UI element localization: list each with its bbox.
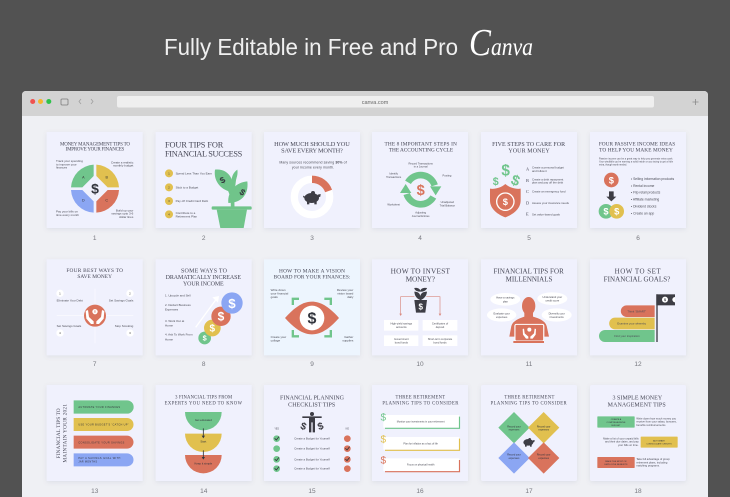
title: PLANNING TIPS TO CONSIDER — [491, 402, 568, 407]
tip bars: USE YOUR BUDGET'S 'CATCH UP' — [78, 424, 129, 427]
label: 13: 13 — [91, 488, 99, 495]
tip rows: Make a list of your unpaid bills — [603, 436, 639, 440]
tip labels: Create a realistic — [111, 160, 134, 164]
icon: rising coins with arrow: $ — [218, 310, 225, 324]
title — [391, 266, 451, 283]
text block: intro: Passive income can be a great way to help you generate extra cash. — [599, 157, 673, 160]
checklist: Create a Budget for Yourself — [294, 457, 330, 461]
title — [280, 396, 345, 408]
panel: card 9 vision board — [264, 259, 360, 355]
icon: coins and arrow: $ — [603, 207, 609, 217]
title: FOUR BEST WAYS TO — [66, 268, 123, 274]
title — [165, 395, 243, 406]
tip boxes: Focus on physical health — [407, 463, 435, 466]
ways list: Set Savings Goals — [109, 298, 134, 302]
bullet list: • Dividend stocks — [631, 205, 657, 209]
tips: goals — [271, 295, 278, 299]
icon: flag on pole: $ — [664, 298, 666, 302]
lettered steps: Assess your insurance needs — [532, 201, 570, 205]
title: TO HELP YOU MAKE MONEY — [599, 147, 673, 153]
title: HOW MUCH SHOULD YOU — [274, 141, 350, 148]
rotated title: MAINTAIN YOUR 2021 — [63, 404, 69, 463]
numbered list: 2 — [168, 185, 170, 189]
cycle step labels: Worksheet — [387, 202, 400, 206]
tip rows: COMPREHENSIVE — [607, 422, 626, 424]
diamond grid: expenses — [538, 429, 550, 432]
lettered steps: Create a debt repayment — [532, 177, 563, 181]
tip bars — [74, 400, 134, 466]
label: 8: 8 — [202, 361, 206, 368]
tips: Gather — [344, 335, 353, 339]
label: 9: 9 — [310, 361, 314, 368]
diamond grid: Record your — [507, 454, 521, 457]
icon: figure balancing dollars: $ — [316, 421, 326, 433]
tip rows: AUTOMATE — [653, 440, 665, 443]
panel: card 4 accounting cycle — [372, 132, 468, 228]
semicircle flow — [185, 412, 222, 473]
title: IMPROVE YOUR FINANCES — [66, 148, 125, 153]
tip bubbles: Understand your — [543, 295, 562, 299]
icon: person at laptop — [509, 297, 549, 343]
icon: figure balancing dollars — [299, 412, 326, 433]
title — [492, 142, 565, 155]
title: 3 SIMPLE MONEY — [612, 396, 663, 402]
tip bubbles — [487, 292, 572, 322]
title: HOW TO SET — [615, 268, 661, 276]
bullet list: • Affiliate marketing — [631, 197, 659, 201]
title — [382, 396, 459, 407]
bullet list: • Selling information products — [631, 177, 674, 181]
heading: Fully Editable in Free and Pro Canva — [164, 22, 533, 64]
panel: card 13 tips to maintain your 2021 — [47, 385, 143, 481]
icon: coins and arrow: $ — [614, 207, 620, 217]
ways list: 1 — [59, 291, 61, 295]
semicircle flow: Get educated — [195, 418, 212, 422]
list: Home — [165, 324, 173, 328]
tip rows: CONSOLIDATE CREDITS — [646, 443, 672, 446]
numbered list — [165, 169, 212, 218]
rotated title: FINANCIAL TIPS TO — [56, 408, 62, 458]
ways list: Set Savings Goals — [57, 324, 82, 328]
panel: card 6 passive income ideas — [590, 132, 686, 228]
label: 6: 6 — [636, 235, 640, 242]
title: SAVE EVERY MONTH? — [281, 147, 343, 154]
tip labels: savings upto 3-6 — [111, 212, 134, 216]
numbered list: Retirement Plan — [176, 214, 197, 218]
icon: coins and arrow — [599, 173, 624, 219]
panel: card 8 increase your income — [156, 259, 252, 355]
diamond grid: expenses — [509, 457, 520, 460]
title — [384, 141, 457, 153]
title: FOUR PASSIVE INCOME IDEAS — [599, 142, 675, 148]
ways list: 3 — [129, 331, 131, 335]
list: 3. Work Out at — [165, 319, 184, 323]
numbered list: Spend Less Than You Earn — [176, 171, 212, 175]
icon: rising coins with arrow: $ — [203, 334, 207, 343]
tip rows: MAKE THE MOST OF — [605, 460, 627, 463]
list — [165, 293, 193, 341]
label: 11: 11 — [526, 361, 533, 368]
heading: Fully Editable in Free and Pro Canva: Canva — [469, 22, 533, 64]
investment boxes: bond funds — [433, 340, 447, 344]
panel: card 14 tips from experts — [156, 385, 252, 481]
tip boxes: Monitor your investments in your retirement — [397, 421, 445, 424]
tip bubbles: plan — [503, 299, 508, 303]
icon: figure balancing dollars: $ — [299, 421, 308, 433]
icon: rising coins with arrow: $ — [210, 324, 216, 335]
lettered steps: D — [526, 200, 529, 205]
tip labels: to improve your — [56, 162, 77, 166]
tips — [271, 288, 354, 343]
title — [493, 267, 564, 284]
title: YOUR MONEY — [508, 149, 550, 155]
tip rows: retirement plans, including — [636, 460, 668, 464]
investment boxes: Government — [394, 337, 409, 341]
lettered steps: Create a personal budget — [532, 166, 564, 170]
icon: coins and arrow: $ — [609, 175, 615, 185]
title: FINANCIAL GOALS? — [604, 276, 670, 284]
label: 12: 12 — [634, 361, 642, 368]
cycle step labels: Unadjusted — [441, 200, 455, 204]
tips: Create your — [271, 335, 286, 339]
title — [604, 268, 670, 284]
list: 2. Deduct Business — [165, 303, 191, 307]
tips: your financial — [271, 291, 289, 295]
checklist — [273, 428, 351, 472]
title: YOUR INCOME — [183, 282, 224, 288]
list: 4. Ask To Work From — [165, 333, 193, 337]
cycle step labels: Identify — [389, 172, 399, 176]
tip labels: Build up your — [116, 208, 133, 212]
cycle step labels: Trial Balance — [440, 203, 456, 207]
numbered list: Contribute to a — [176, 211, 196, 215]
ways list: 2 — [129, 291, 131, 295]
icon: plant pot with arrows: $ — [418, 303, 423, 312]
ways list — [56, 290, 134, 337]
tip boxes: $ — [381, 434, 387, 445]
tip rows: benefits reimbursements — [636, 423, 666, 427]
icon: money plant: $ — [218, 174, 227, 186]
tip bars: CONSOLIDATE YOUR SAVINGS — [78, 441, 125, 444]
icon: shield with dollars: $ — [493, 176, 499, 188]
title: MONEY MANAGEMENT TIPS TO — [60, 142, 130, 147]
checklist: Create a Budget for Yourself — [294, 437, 330, 441]
investment boxes: deposit — [436, 325, 445, 329]
lettered steps: Set value-based goals — [532, 212, 561, 216]
title: MANAGEMENT TIPS — [608, 402, 666, 408]
text block: recommendation: your income every month. — [292, 165, 334, 169]
cycle step labels: Adjusting — [415, 211, 427, 215]
bullet list: • Create an app — [631, 212, 654, 216]
investment boxes: Short-term corporate — [428, 337, 453, 341]
lettered steps: Create an emergency fund — [532, 190, 566, 194]
investment boxes: Certificates of — [432, 322, 448, 326]
icon: shield with dollars: $ — [509, 172, 522, 190]
title: FINANCIAL SUCCESS — [165, 150, 243, 159]
tip rows: receive from your salary, bonuses, — [636, 420, 677, 424]
numbered list: Pay off Credit Card Debt — [176, 199, 208, 203]
investment boxes: bond funds — [395, 340, 409, 344]
tip rows: Write down how much money you — [636, 416, 677, 420]
label: 3: 3 — [310, 235, 314, 242]
title — [60, 142, 130, 153]
browser toolbar — [30, 96, 698, 108]
investment boxes — [384, 320, 457, 346]
tip labels: Track your spending — [56, 159, 83, 163]
diamond grid: Record your — [537, 454, 551, 457]
icon: rising coins with arrow: $ — [228, 296, 236, 311]
title: MONEY? — [406, 274, 435, 283]
checklist: NO — [346, 428, 349, 430]
tip bars: PAY A SAVINGS GOAL WITH — [78, 457, 121, 460]
label: 7: 7 — [93, 361, 97, 368]
tip bubbles: investments — [550, 315, 564, 319]
title: SOME WAYS TO — [181, 269, 228, 275]
panel: card 15 financial planning checklist — [264, 385, 360, 481]
tip labels: dollar lines — [119, 215, 134, 219]
tip bubbles: Have a savings — [496, 296, 515, 300]
title: THREE RETIREMENT — [395, 396, 445, 401]
chart: four-part ring: A — [82, 176, 85, 180]
title: FINANCIAL TIPS FOR — [493, 267, 564, 275]
icon: hands holding coin: $ — [94, 310, 96, 314]
tip rows: your bills on time. — [618, 443, 639, 447]
tip bubbles: Diversify your — [549, 311, 565, 315]
tip rows: CREATE A — [611, 418, 622, 421]
icon: shield with dollars: $ — [503, 197, 509, 207]
ways list: 4 — [59, 331, 61, 335]
text block: recommendation — [279, 160, 347, 169]
checklist: Create a Budget for Yourself — [294, 447, 330, 451]
tip labels: finances — [56, 166, 68, 170]
list: Expenses — [165, 307, 179, 311]
template gallery — [47, 132, 686, 495]
tip rows: EMPLOYEE BENEFITS — [604, 464, 628, 466]
title: FINANCIAL PLANNING — [280, 396, 345, 402]
label: 10: 10 — [416, 361, 424, 368]
title — [608, 396, 666, 408]
goal steps — [599, 305, 655, 342]
lettered steps: E — [526, 212, 529, 217]
title: THE 8 IMPORTANT STEPS IN — [384, 141, 457, 147]
title: DRAMATICALLY INCREASE — [166, 275, 241, 281]
browser window — [22, 91, 708, 497]
list: 1. Upcycle and Sell — [165, 293, 191, 297]
title: THE ACCOUNTING CYCLE — [389, 147, 453, 153]
title: CHECKLIST TIPS — [288, 402, 335, 408]
title — [274, 268, 351, 280]
title: PLANNING TIPS TO CONSIDER — [382, 402, 459, 407]
label: 4: 4 — [418, 235, 422, 242]
text block: intro: extra, though work needed. — [599, 163, 627, 166]
tip bars: JAR MONTHS — [78, 460, 97, 463]
goal steps: Examine your whereby — [617, 322, 647, 326]
tip rows: and their due dates, and pay — [605, 440, 639, 444]
title: FIVE STEPS TO CARE FOR — [492, 142, 565, 148]
investment boxes: accounts — [396, 325, 407, 329]
goal steps: Find your inspiration — [614, 334, 640, 338]
heading: Fully Editable in Free and Pro Canva: Fully Editable in Free and Pro — [164, 34, 458, 60]
panel: card 3 how much should you save — [264, 132, 360, 228]
numbered list: 3 — [168, 199, 170, 203]
browser toolbar: canva.com — [362, 100, 389, 106]
label: 5: 5 — [527, 235, 531, 242]
text block: intro: Your windfalls you're earning a solid inside or you trying to get a little — [599, 160, 674, 163]
cycle step labels: Transactions — [386, 175, 402, 179]
lettered steps: and follow it — [532, 169, 547, 173]
cycle step labels: Journal Entries — [412, 214, 430, 218]
tips: Write down — [271, 288, 286, 292]
label: 18: 18 — [634, 488, 642, 495]
panel: card 2 four tips for financial success — [156, 132, 252, 228]
title: 3 FINANCIAL TIPS FROM — [175, 395, 232, 400]
label: 15: 15 — [308, 488, 316, 495]
chart: four-part ring: $ — [91, 181, 99, 197]
label: 16: 16 — [416, 488, 424, 495]
goal steps: Think 'SMART' — [627, 309, 646, 313]
tip labels — [56, 159, 134, 219]
tips: Review your — [337, 288, 353, 292]
tip rows: matching programs. — [636, 464, 660, 468]
panel: card 7 best ways to save money — [47, 259, 143, 355]
chart: four-part ring: B — [105, 176, 108, 180]
tip boxes — [381, 412, 459, 472]
title: SAVE MONEY — [77, 274, 112, 280]
tip labels: monthly budget — [113, 164, 133, 168]
icon: money plant: $ — [238, 187, 247, 198]
tip rows: BUDGET — [611, 425, 621, 427]
bullet list: • Flip retail products — [631, 191, 661, 195]
panel: card 1 money management tips — [47, 132, 143, 228]
title: THREE RETIREMENT — [504, 396, 554, 401]
icon: shield with dollars — [490, 163, 522, 217]
ways list: Stop Smoking — [115, 324, 134, 328]
tip bubbles: expenses — [496, 316, 508, 319]
tip labels: Pay your bills on — [56, 210, 78, 214]
title: EXPERTS YOU NEED TO KNOW — [165, 401, 243, 406]
label: 1: 1 — [93, 235, 97, 242]
panel: card 12 how to set financial goals — [590, 259, 686, 355]
tips: collage — [271, 339, 280, 343]
label: 17: 17 — [525, 488, 533, 495]
cycle step labels: Record Transactions — [408, 161, 434, 165]
chart: four-part ring: C — [105, 199, 108, 203]
chart: savings donut — [294, 179, 330, 215]
tip boxes: Plan for inflation as a fact of life — [403, 442, 439, 445]
ways list: Eliminate Your Debt — [57, 298, 83, 302]
title: MILLENNIALS — [506, 276, 552, 284]
diamond grid: expenses — [509, 429, 520, 432]
text block: recommendation: Many sources recommend saving 30% of — [279, 160, 347, 164]
lettered steps: plan and pay off the debt — [532, 181, 563, 185]
title — [166, 269, 241, 288]
tips: daily — [347, 295, 354, 299]
tips: vision board — [337, 291, 354, 295]
text block: intro — [599, 157, 674, 166]
icon: piggy bank — [523, 438, 535, 447]
title: HOW TO MAKE A VISION — [279, 268, 345, 274]
tip bars: AUTOMATE YOUR FINANCES — [78, 406, 120, 409]
icon: cycle arrows with dollar: $ — [417, 183, 425, 199]
lettered steps: B — [526, 178, 529, 183]
diamond grid: expenses — [538, 457, 550, 460]
panel: card 18 simple money management tips — [590, 385, 686, 481]
panel: card 5 five steps to care for your money — [481, 132, 577, 228]
lettered steps: C — [526, 189, 529, 194]
icon: shield with dollars: $ — [501, 163, 510, 180]
title: FOUR TIPS FOR — [165, 140, 224, 149]
tip bubbles: credit score — [545, 299, 560, 303]
chart: four-part ring: D — [82, 199, 85, 203]
title: BOARD FOR YOUR FINANCES: — [274, 274, 351, 280]
icon: eye with dollar: $ — [308, 311, 317, 328]
diamond grid: Record your — [507, 425, 521, 428]
tip rows: Take full advantage of group — [636, 457, 670, 461]
tips: supplies — [342, 339, 354, 343]
numbered list: 4 — [168, 212, 170, 216]
checklist: YES — [274, 428, 279, 430]
tip bubbles: Evaluate your — [494, 311, 510, 315]
semicircle flow: Keep it simple — [194, 461, 213, 465]
icon: piggy bank — [303, 191, 321, 204]
cycle step labels — [386, 161, 456, 218]
lettered steps: A — [526, 167, 530, 172]
icon: rising coins with arrow — [196, 292, 243, 344]
list: Home — [165, 337, 173, 341]
title — [491, 396, 568, 407]
title: HOW TO INVEST — [391, 266, 451, 275]
panel: card 10 how to invest money — [372, 259, 468, 355]
panel: card 11 tips for millennials — [481, 259, 577, 355]
rotated title — [56, 404, 69, 463]
label: 2: 2 — [202, 235, 206, 242]
panel: card 16 retirement planning tips list — [372, 385, 468, 481]
tip labels: time every month — [56, 213, 79, 217]
investment boxes: High-yield savings — [391, 322, 413, 326]
lettered steps — [526, 166, 570, 217]
icon: money plant — [212, 169, 252, 228]
diamond grid — [498, 412, 559, 474]
checklist: Create a Budget for Yourself — [294, 467, 330, 471]
bullet list — [631, 177, 674, 216]
label: 14: 14 — [200, 488, 208, 495]
cycle step labels: Posting — [443, 174, 452, 178]
semicircle flow: Start — [200, 440, 207, 444]
panel: card 17 retirement planning tips diamonds — [481, 385, 577, 481]
bullet list: • Rental income — [631, 184, 655, 188]
title — [165, 140, 243, 159]
tip boxes: $ — [381, 412, 387, 423]
numbered list: 1 — [168, 171, 170, 175]
tip boxes: $ — [381, 456, 387, 467]
title — [274, 141, 350, 154]
tip rows — [597, 416, 678, 468]
title — [66, 268, 123, 280]
cycle step labels: in a Journal — [414, 165, 428, 169]
chart: four-part ring — [71, 165, 119, 213]
title — [599, 142, 675, 153]
diamond grid: Record your — [537, 425, 551, 428]
numbered list: Stick to a Budget — [176, 185, 198, 189]
